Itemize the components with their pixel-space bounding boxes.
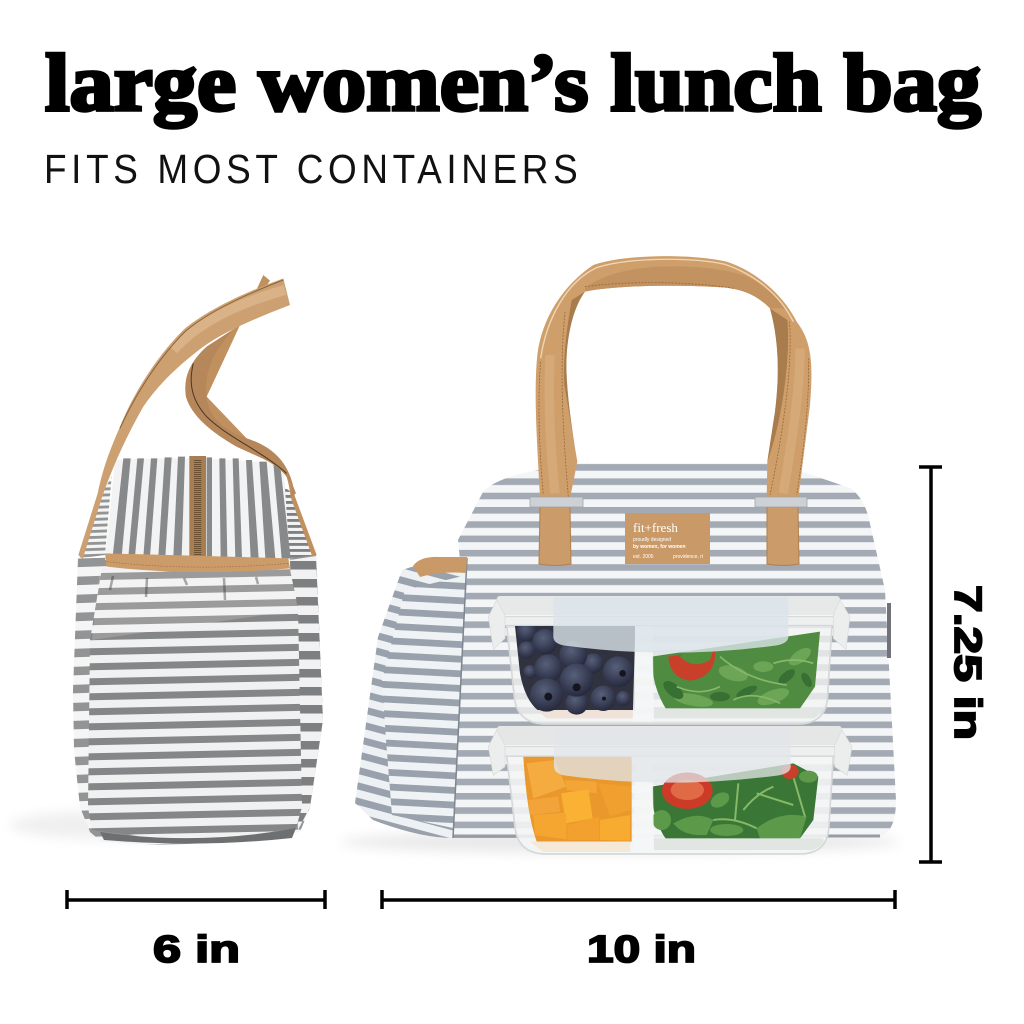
glass containers bbox=[488, 596, 852, 854]
salad bbox=[652, 763, 823, 850]
brand patch bbox=[625, 513, 710, 564]
brand patch: by women, for women bbox=[633, 544, 686, 550]
front strap bbox=[78, 278, 290, 559]
rear strap bbox=[185, 275, 317, 557]
left flank bbox=[79, 477, 112, 558]
height dimension: 7.25 in bbox=[919, 467, 988, 862]
subtitle: FITS MOST CONTAINERS bbox=[44, 147, 578, 192]
title: large women’s lunch bag bbox=[45, 37, 981, 128]
zipper bbox=[189, 456, 206, 562]
metal clips bbox=[530, 497, 807, 507]
tomato bbox=[662, 772, 713, 809]
divider bbox=[633, 626, 654, 722]
brand patch: providence, ri bbox=[673, 554, 703, 560]
side bag outer flanks bbox=[73, 555, 323, 844]
side bag mesh pocket bbox=[88, 568, 302, 838]
lid bbox=[497, 726, 842, 745]
salad bbox=[652, 632, 820, 718]
tomato bbox=[668, 650, 715, 681]
top panel bbox=[105, 457, 291, 560]
handles, reference zoom coordinates bbox=[536, 256, 811, 498]
lid bbox=[497, 596, 840, 615]
side water pocket bbox=[355, 557, 467, 838]
pocket light wash and bottom shade bbox=[92, 570, 298, 640]
back strap shading bbox=[564, 292, 788, 462]
bottom container bbox=[488, 726, 852, 854]
width dimension: 10 in bbox=[382, 890, 895, 971]
side strap and top panel, reference zoom coordinates bbox=[78, 275, 317, 572]
flap bbox=[554, 727, 791, 783]
width dimension: 6 in: 6 in bbox=[153, 929, 240, 971]
side view lunch bag bbox=[10, 275, 323, 844]
pocket gather marks bbox=[110, 576, 258, 600]
height dimension: 7.25 in: 7.25 in bbox=[946, 585, 988, 740]
brand patch: proudly designed bbox=[633, 537, 671, 543]
handle tabs bbox=[539, 507, 799, 566]
divider bbox=[633, 757, 654, 852]
brand patch: est. 2005 bbox=[633, 554, 654, 560]
front view lunch bag bbox=[340, 256, 900, 853]
clips bbox=[488, 730, 852, 775]
ground shadow bbox=[340, 831, 900, 853]
width dimension: 10 in: 10 in bbox=[587, 929, 696, 971]
pocket trim bbox=[413, 557, 467, 577]
blueberries bbox=[515, 622, 635, 718]
clips bbox=[488, 600, 850, 649]
right flank bbox=[283, 487, 314, 558]
pocket rim bbox=[105, 553, 290, 572]
brand patch: fit+fresh bbox=[633, 520, 678, 535]
side zipper pull bbox=[887, 603, 891, 658]
width dimension: 6 in bbox=[67, 890, 325, 971]
cheese cubes bbox=[523, 757, 632, 852]
top container bbox=[488, 596, 850, 724]
bag body bbox=[453, 463, 896, 838]
flap bbox=[553, 597, 788, 653]
